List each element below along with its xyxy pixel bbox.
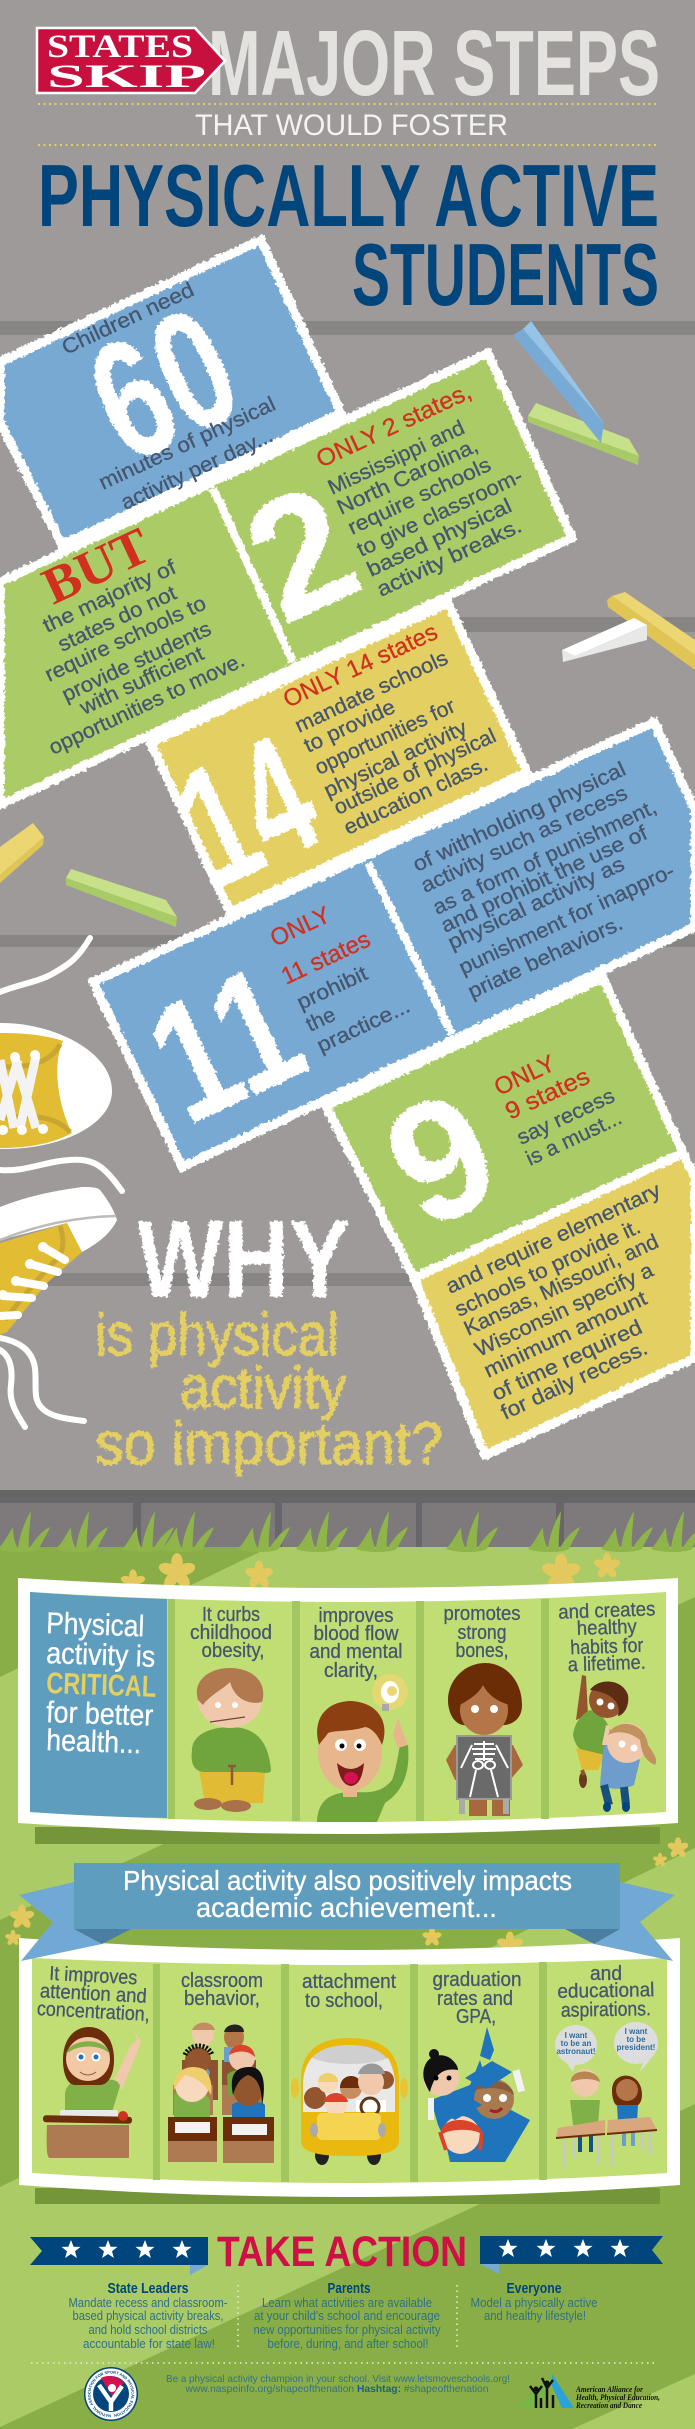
- icon: children with speech bubbles: I want: [625, 2027, 648, 2036]
- icon: playing children: [573, 1675, 656, 1812]
- 9 states text: say recess: [513, 1084, 618, 1150]
- pavement background: [0, 0, 695, 1549]
- shoes and laces: [0, 938, 122, 1427]
- icon: children with speech bubbles: astronaut!: [556, 2047, 596, 2056]
- 9 states text: [490, 1050, 625, 1171]
- ribbon: academic achievement: academic achievement...: [196, 1892, 497, 1923]
- only 2 states text: [312, 378, 526, 602]
- text: parents: Learn what activities are available: [262, 2295, 432, 2310]
- text: parents: [254, 2280, 441, 2351]
- 11 states text: practice...: [313, 994, 414, 1058]
- column: graduation rates: graduation: [432, 1969, 522, 1991]
- 11 states text: [266, 901, 414, 1058]
- panel: 9 states: [326, 978, 683, 1278]
- column: healthy habits: and creates: [558, 1598, 656, 1624]
- text: state leaders: [68, 2280, 228, 2351]
- only 2 states text: Mississippi and: [324, 416, 468, 500]
- icon: classroom of children: [168, 2022, 274, 2163]
- sneaker toe: [0, 1023, 112, 1149]
- column: classroom behavior: [168, 1970, 274, 2163]
- panel: recess requirements: Wisconsin specify a: [471, 1259, 657, 1362]
- logo: american alliance: Health, Physical Education,: [575, 2393, 660, 2402]
- column: blood flow: improves: [318, 1605, 394, 1627]
- 11 states text: prohibit: [293, 962, 371, 1015]
- column: graduation rates: GPA,: [456, 2006, 496, 2028]
- panel: recess requirements: for daily recess.: [497, 1336, 651, 1425]
- heading: TAKE ACTION: [217, 2228, 467, 2276]
- icon: children with speech bubbles: to be an: [561, 2039, 591, 2048]
- number: 11: 11: [122, 929, 329, 1160]
- icon: boy with idea: [317, 1674, 408, 1822]
- column: healthy habits: habits for: [570, 1635, 644, 1659]
- 11 states text: ONLY: [266, 901, 335, 952]
- sneaker heel: [0, 1187, 117, 1335]
- panel: academic achievement: [19, 1938, 680, 2204]
- icon: boy: [192, 1668, 271, 1812]
- column: attachment to school: attachment: [302, 1971, 396, 1993]
- text: state leaders: and hold school districts: [88, 2322, 208, 2337]
- icon: children with speech bubbles: to be: [626, 2035, 646, 2044]
- column: attention: [36, 1963, 150, 2158]
- column: educational aspirations: aspirations.: [561, 1998, 651, 2022]
- column: blood flow: [310, 1605, 408, 1822]
- heading: why is physical activity so important: is physical: [95, 1301, 339, 1368]
- panel: 11 states: [93, 722, 695, 1167]
- number: 60: 60: [62, 271, 265, 500]
- column: healthy habits: healthy: [576, 1616, 637, 1640]
- panel: 60 minutes: [0, 240, 341, 545]
- only 2 states text: North Carolina,: [333, 434, 482, 520]
- only 2 states text: activity breaks.: [373, 514, 525, 602]
- logo: american alliance: American Alliance for: [575, 2385, 644, 2394]
- badge: states skip: SKIP: [47, 59, 206, 95]
- icon: children with speech bubbles: I want: [565, 2031, 588, 2040]
- text: everyone: Model a physically active: [470, 2295, 598, 2310]
- 11 states text: 11 states: [277, 926, 375, 990]
- subheading: THAT WOULD FOSTER: [195, 109, 508, 142]
- column: obesity: childhood: [190, 1622, 272, 1644]
- column: attachment to school: to school,: [305, 1990, 383, 2012]
- right star ribbon: [480, 2236, 663, 2274]
- column: healthy habits: [558, 1598, 656, 1812]
- label: minutes per day: activity per day...: [117, 424, 277, 515]
- column: educational aspirations: educational: [557, 1979, 655, 2003]
- column: educational aspirations: [555, 1963, 658, 2168]
- withholding text: priate behaviors.: [464, 912, 626, 1004]
- panel: recess requirements: [414, 1153, 695, 1455]
- text: physical activity is critical: for better: [46, 1696, 154, 1733]
- column: blood flow: and mental: [310, 1641, 402, 1663]
- but text: states do not: [54, 582, 180, 657]
- footer text: www.naspeinfo.org/shapeofthenation Hashtag: #shapeofthenation: [185, 2383, 489, 2395]
- but text: provide students: [58, 617, 215, 707]
- icon: girl with x-ray: [446, 1663, 523, 1816]
- 11 states text: the: [302, 1003, 339, 1037]
- icon: graduates: [423, 2027, 530, 2162]
- withholding text: activity such as recess: [417, 782, 631, 898]
- footer text: [166, 2373, 510, 2395]
- column: blood flow: clarity,: [324, 1660, 378, 1682]
- 14 states text: ONLY 14 states: [279, 618, 442, 713]
- column: graduation rates: rates and: [437, 1988, 513, 2010]
- ribbon: academic achievement: [19, 1863, 675, 1961]
- panel: 14 states: [151, 603, 527, 924]
- text: parents: new opportunities for physical activity: [254, 2322, 441, 2337]
- column: obesity: It curbs: [202, 1604, 260, 1626]
- left star ribbon: [30, 2237, 208, 2275]
- flowers: [5, 1552, 689, 1958]
- text: physical activity is critical: activity is: [46, 1637, 156, 1674]
- 14 states text: [279, 618, 500, 840]
- label: children need: Children need: [58, 278, 198, 360]
- 14 states text: education class.: [340, 753, 491, 840]
- badge: states skip: [37, 28, 225, 95]
- text: physical activity is critical: [46, 1607, 157, 1760]
- panel: recess requirements: Kansas, Missouri, and: [460, 1230, 662, 1341]
- text: everyone: [470, 2280, 598, 2323]
- column: bones: bones,: [456, 1640, 508, 1662]
- footer text: Be a physical activity champion in your school. Visit www.letsmoveschools.org!: [166, 2373, 510, 2385]
- withholding text: [409, 758, 678, 1004]
- column: classroom behavior: classroom: [181, 1970, 263, 1992]
- text: parents: at your child's school and encourage: [254, 2308, 440, 2323]
- banner: take action: [30, 2228, 663, 2276]
- only 2 states text: require schools: [344, 453, 495, 540]
- grass background: [0, 1511, 695, 2429]
- but text: opportunities to move.: [45, 649, 248, 760]
- icon: student raising hand: [43, 2027, 141, 2158]
- text: parents: Parents: [328, 2280, 370, 2297]
- text: everyone: and healthy lifestyle!: [484, 2308, 586, 2323]
- 14 states text: opportunities for: [311, 694, 459, 780]
- logo: american alliance: [516, 2374, 660, 2410]
- 9 states text: 9 states: [501, 1063, 594, 1125]
- column: bones: promotes: [444, 1603, 520, 1625]
- 14 states text: physical activity: [320, 716, 471, 803]
- 14 states text: mandate schools: [291, 647, 452, 738]
- column: attention: concentration,: [36, 1998, 150, 2026]
- text: state leaders: based physical activity breaks,: [72, 2308, 224, 2323]
- panel: recess requirements: and require elementary: [442, 1179, 665, 1299]
- 9 states text: is a must...: [522, 1106, 625, 1171]
- withholding text: and prohibit the use of: [437, 822, 651, 938]
- heading: why is physical activity so important: so important?: [95, 1410, 443, 1477]
- column: blood flow: blood flow: [314, 1623, 399, 1645]
- withholding text: as a form of punishment,: [429, 796, 660, 920]
- text: physical activity is critical: CRITICAL: [46, 1667, 157, 1704]
- logo: american alliance: Recreation and Dance: [575, 2401, 642, 2410]
- column: attention: attention and: [39, 1980, 147, 2008]
- column: educational aspirations: and: [590, 1963, 622, 1985]
- text: parents: before, during, and after school!: [268, 2336, 428, 2351]
- panel: but / only 2 states: [0, 353, 572, 805]
- but text: [34, 517, 248, 760]
- text: everyone: Everyone: [506, 2280, 562, 2297]
- text: physical activity is critical: Physical: [46, 1607, 145, 1643]
- heading: why is physical activity so important: activity: [180, 1354, 346, 1421]
- text: state leaders: accountable for state law!: [83, 2336, 215, 2351]
- panel: better health: [18, 1578, 678, 1844]
- column: obesity: obesity,: [202, 1640, 264, 1662]
- but text: the majority of: [39, 556, 180, 638]
- text: physical activity is critical: health...: [46, 1724, 142, 1760]
- withholding text: punishment for inappro-: [455, 859, 678, 980]
- but text: require schools to: [41, 592, 210, 687]
- number: 14: 14: [151, 699, 344, 924]
- panel: recess requirements: of time required: [488, 1316, 646, 1406]
- chalk sticks: [0, 321, 695, 927]
- ribbon: academic achievement: Physical activity also positively impacts: [123, 1865, 572, 1896]
- logo: national association for sport and physical education: NATIONAL ASSOCIATION FOR SPORT AND PHYSICAL EDUCATION: [88, 2370, 134, 2418]
- column: obesity: [190, 1604, 272, 1812]
- panel: recess requirements: schools to provide it.: [451, 1215, 644, 1322]
- text: state leaders: Mandate recess and classroom-: [68, 2295, 228, 2310]
- panel: recess requirements: minimum amount: [480, 1287, 651, 1383]
- column: bones: strong: [458, 1622, 506, 1644]
- only 2 states text: to give classroom-: [353, 465, 526, 562]
- number: 2: 2: [218, 447, 384, 660]
- withholding text: of withholding physical: [409, 758, 629, 877]
- but text: BUT: [34, 517, 159, 616]
- only 2 states text: based physical: [363, 494, 515, 582]
- 14 states text: outside of physical: [330, 724, 500, 820]
- badge: states skip: STATES: [47, 29, 193, 65]
- title: [37, 11, 660, 324]
- icon: children with speech bubbles: [555, 2022, 658, 2168]
- heading: why is physical activity so important: WHY: [137, 1198, 350, 1321]
- only 2 states text: ONLY 2 states,: [312, 378, 476, 473]
- 14 states text: to provide: [300, 695, 399, 758]
- column: graduation rates: [423, 1969, 530, 2162]
- number: 9: 9: [358, 1053, 524, 1266]
- column: healthy habits: a lifetime.: [567, 1652, 646, 1676]
- label: minutes per day: minutes of physical: [95, 393, 279, 495]
- heading: why is physical activity so important: [95, 1198, 443, 1477]
- 9 states text: ONLY: [490, 1050, 560, 1101]
- icon: children with speech bubbles: president!: [617, 2043, 655, 2052]
- but text: with sufficient: [75, 642, 208, 720]
- column: classroom behavior: behavior,: [184, 1988, 260, 2010]
- column: attention: It improves: [49, 1963, 138, 1989]
- text: state leaders: State Leaders: [108, 2280, 188, 2297]
- icon: school bus: [291, 2038, 408, 2165]
- withholding text: physical activity as: [444, 853, 628, 955]
- column: bones: [444, 1603, 523, 1816]
- column: attachment to school: [291, 1971, 408, 2165]
